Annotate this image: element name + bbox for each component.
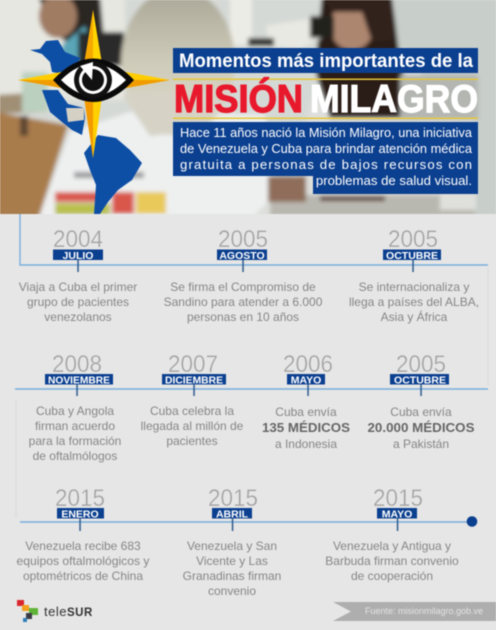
milestone: 2005 octubre Pakistan: 2005 <box>396 351 446 378</box>
icon: compass star with eye <box>18 10 170 158</box>
intro text block: Hace 11 años nació la Misión Milagro, una iniciativa <box>180 125 473 140</box>
milestone: 2015 abril: Venezuela y San <box>187 539 277 553</box>
milestone: 2015 mayo: Barbuda firman convenio <box>325 554 459 568</box>
milestone: 2007 diciembre: Cuba celebra la <box>150 404 234 418</box>
title: Misión Milagro: MILAGRO <box>310 78 478 121</box>
milestone: 2007 diciembre: llegada al millón de <box>141 419 244 433</box>
source banner <box>333 602 496 621</box>
milestone: 2006 mayo: 135 MÉDICOS <box>262 420 350 435</box>
milestone: 2006 mayo: Cuba envía <box>275 405 337 419</box>
milestone: 2006 mayo: a Indonesia <box>275 437 337 451</box>
milestone: 2005 agosto: Se firma el Compromiso de <box>170 280 316 294</box>
intro text block <box>173 122 478 194</box>
milestone: 2015 abril: ABRIL <box>216 508 249 520</box>
icon: blue map of the Americas <box>30 40 142 214</box>
milestone: 2008 noviembre: NOVIEMBRE <box>48 374 110 386</box>
milestone: 2005 octubre Pakistan: 20.000 MÉDICOS <box>368 420 475 435</box>
intro text block: gratuita a personas de bajos recursos con <box>180 157 472 172</box>
milestone: 2005 octubre: Se internacionaliza y <box>359 280 469 294</box>
milestone: 2007 diciembre: DICIEMBRE <box>165 374 223 386</box>
milestone: 2004 julio: 2004 <box>53 226 103 253</box>
milestone: 2005 octubre: Asia y África <box>381 309 448 324</box>
milestone: 2015 enero: ENERO <box>61 508 99 520</box>
milestone: 2015 abril: Granadinas firman <box>183 569 281 583</box>
milestone: 2015 mayo: Venezuela y Antigua y <box>333 539 451 553</box>
milestone: 2015 enero: 2015 <box>55 485 105 512</box>
milestone: 2005 octubre Pakistan <box>368 351 475 451</box>
milestone: 2005 octubre Pakistan: a Pakistán <box>393 437 449 451</box>
milestone: 2005 agosto: Sandino para atender a 6.000 <box>164 295 323 309</box>
milestone: 2008 noviembre: Cuba y Angola <box>36 404 114 418</box>
milestone: 2015 enero: Venezuela recibe 683 <box>25 539 141 553</box>
intro text block: problemas de salud visual. <box>316 173 472 188</box>
heading bar: Momentos más importantes de la <box>179 51 473 72</box>
milestone: 2005 octubre: 2005 <box>388 226 438 253</box>
milestone: 2015 mayo <box>325 485 459 583</box>
milestone: 2004 julio: JULIO <box>63 250 93 262</box>
milestone: 2007 diciembre: pacientes <box>166 434 218 448</box>
milestone: 2008 noviembre: firman acuerdo <box>35 419 115 433</box>
icon: eye <box>53 58 134 102</box>
title: Misión Milagro: MISIÓN <box>174 77 303 121</box>
timeline lines <box>15 214 488 522</box>
milestone: 2004 julio <box>19 226 137 324</box>
timeline end dot <box>467 516 477 527</box>
milestone: 2015 abril: Vicente y Las <box>196 554 268 568</box>
milestone: 2004 julio: Viaja a Cuba el primer <box>19 280 137 294</box>
milestone: 2015 enero: optométricos de China <box>23 569 143 583</box>
milestone: 2008 noviembre: 2008 <box>52 351 102 378</box>
milestone: 2008 noviembre <box>29 351 121 463</box>
milestone: 2004 julio: venezolanos <box>44 310 112 324</box>
logo: teleSUR: teleSUR <box>44 604 93 619</box>
title: Misión Milagro <box>174 77 478 121</box>
milestone: 2015 mayo: de cooperación <box>351 569 433 583</box>
milestone: 2008 noviembre: para la formación <box>29 434 121 448</box>
milestone: 2015 mayo: MAYO <box>382 508 412 520</box>
milestone: 2005 agosto <box>164 226 323 324</box>
milestone: 2007 diciembre: 2007 <box>168 351 218 378</box>
milestone: 2006 mayo <box>262 351 350 451</box>
milestone: 2015 abril: 2015 <box>208 485 258 512</box>
milestone: 2005 octubre: OCTUBRE <box>386 250 438 262</box>
source banner: Fuente: misionmilagro.gob.ve <box>365 606 483 616</box>
milestone: 2005 octubre Pakistan: OCTUBRE <box>394 374 446 386</box>
milestone: 2005 octubre Pakistan: Cuba envía <box>390 405 452 419</box>
milestone: 2005 agosto: 2005 <box>218 226 268 253</box>
milestone: 2005 agosto: AGOSTO <box>219 250 265 262</box>
milestone: 2015 enero <box>16 485 150 583</box>
intro text block: de Venezuela y Cuba para brindar atención médica <box>180 141 473 156</box>
milestone: 2005 octubre <box>349 226 479 324</box>
milestone: 2015 enero: equipos oftalmológicos y <box>16 554 150 568</box>
milestone: 2005 octubre: llega a países del ALBA, <box>349 295 479 309</box>
milestone: 2015 abril: convenio <box>208 584 256 598</box>
milestone: 2015 mayo: 2015 <box>373 485 423 512</box>
milestone: 2006 mayo: 2006 <box>283 351 333 378</box>
milestone: 2004 julio: grupo de pacientes <box>27 295 129 309</box>
logo: teleSUR <box>17 600 93 622</box>
milestone: 2007 diciembre <box>141 351 244 448</box>
yellow rules <box>173 78 478 119</box>
milestone: 2005 agosto: personas en 10 años <box>187 310 299 324</box>
milestone: 2006 mayo: MAYO <box>291 374 321 386</box>
milestone: 2008 noviembre: de oftalmólogos <box>33 449 117 463</box>
milestone: 2015 abril <box>183 485 281 598</box>
header photo <box>0 0 496 225</box>
